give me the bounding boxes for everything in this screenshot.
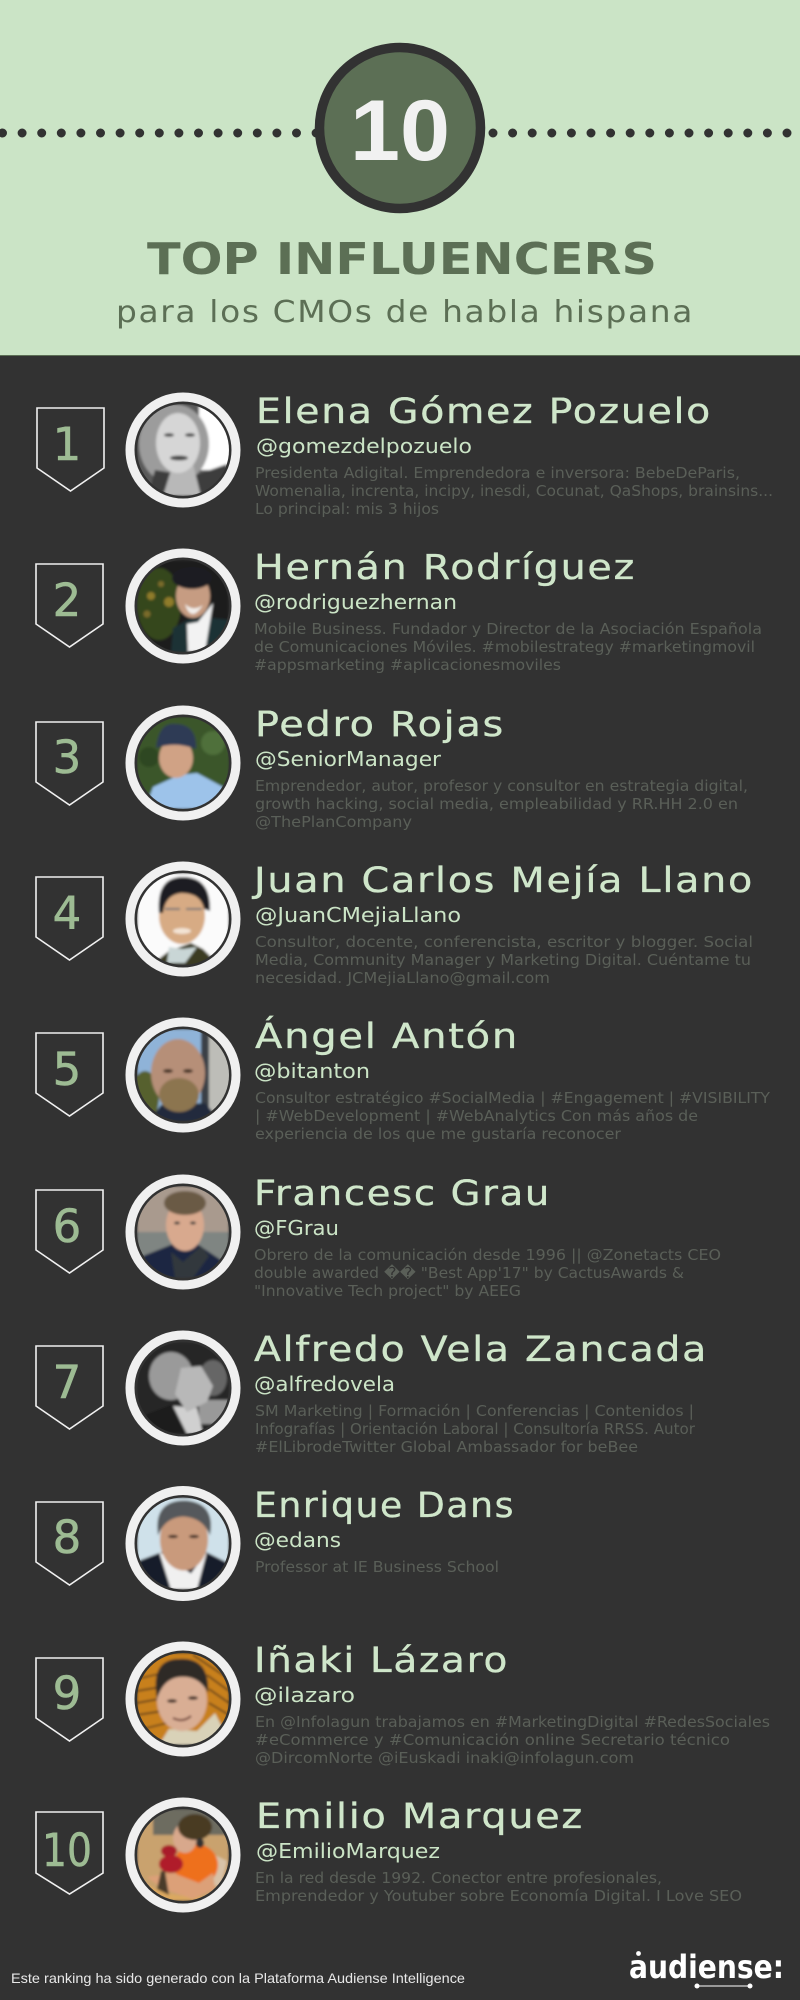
bio 6: Obrero de la comunicación desde 1996 || @Zonetacts CEO (254, 1246, 721, 1264)
handle 1: @gomezdelpozuelo (256, 434, 472, 458)
rank badge 8: 8 (53, 1511, 81, 1564)
rank badge 5: 5 (53, 1043, 81, 1096)
bio 1 (255, 464, 773, 518)
name 6: Francesc Grau (254, 1174, 551, 1214)
bio 3: Emprendedor, autor, profesor y consultor en estrategia digital, (255, 777, 748, 795)
bio 10: Emprendedor y Youtuber sobre Economía Digital. I Love SEO (255, 1887, 742, 1905)
name 3: Pedro Rojas (255, 705, 505, 745)
bio 4: Media, Community Manager y Marketing Digital. Cuéntame tu (255, 951, 751, 969)
influencer 7 (36, 1330, 708, 1456)
badge: 10 circle: 10 (350, 83, 450, 179)
name 10: Emilio Marquez (256, 1797, 584, 1837)
name 8: Enrique Dans (254, 1486, 515, 1526)
bio 2: de Comunicaciones Móviles. #mobilestrategy #marketingmovil (254, 638, 755, 656)
rank badge 1 (37, 408, 104, 491)
handle 9: @ilazaro (254, 1683, 355, 1707)
bio 6 (254, 1246, 721, 1300)
bio 7: SM Marketing | Formación | Conferencias | Contenidos | (255, 1402, 694, 1420)
avatar 1 (130, 397, 236, 503)
bio 3: growth hacking, social media, empleabilidad y RR.HH 2.0 en (255, 795, 738, 813)
rank badge 4: 4 (53, 887, 81, 940)
bio 2: #appsmarketing #aplicacionesmoviles (254, 656, 561, 674)
header panel (0, 0, 800, 356)
bio 4: Consultor, docente, conferencista, escritor y blogger. Social (255, 933, 753, 951)
bio 2: Mobile Business. Fundador y Director de la Asociación Española (254, 620, 762, 638)
bio 1: Lo principal: mis 3 hijos (255, 500, 439, 518)
name 1: Elena Gómez Pozuelo (256, 392, 712, 432)
avatar 3 (130, 710, 236, 816)
handle 4: @JuanCMejiaLlano (255, 903, 461, 927)
bio 9 (255, 1713, 770, 1767)
influencer 6 (36, 1174, 721, 1300)
rank badge 1: 1 (53, 418, 81, 471)
influencer 10 (36, 1797, 742, 1908)
bio 4: necesidad. JCMejiaLlano@gmail.com (255, 969, 550, 987)
name 5: Ángel Antón (255, 1016, 519, 1057)
influencer 9 (36, 1641, 770, 1767)
rank badge 2: 2 (53, 574, 81, 627)
handle 5: @bitanton (254, 1059, 370, 1083)
bio 5 (255, 1089, 771, 1143)
name 9: Iñaki Lázaro (254, 1641, 509, 1681)
bio 7 (255, 1402, 696, 1456)
avatar 8 (130, 1490, 236, 1596)
bio 7: Infografías | Orientación Laboral | Consultoría RRSS. Autor (255, 1420, 696, 1438)
bio 10: En la red desde 1992. Conector entre profesionales, (255, 1869, 662, 1887)
handle 8: @edans (254, 1528, 341, 1552)
bio 10 (255, 1869, 742, 1905)
bio 9: @DircomNorte @iEuskadi inaki@infolagun.com (255, 1749, 634, 1767)
avatar 4 (130, 866, 236, 972)
handle 7: @alfredovela (254, 1372, 395, 1396)
rank badge 4 (36, 877, 103, 960)
influencer 1 (37, 392, 773, 518)
name 4: Juan Carlos Mejía Llano (252, 861, 754, 901)
bio 5: | #WebDevelopment | #WebAnalytics Con más años de (255, 1107, 698, 1125)
bio 5: Consultor estratégico #SocialMedia | #Engagement | #VISIBILITY (255, 1089, 771, 1107)
bio 6: "Innovative Tech project" by AEEG (254, 1282, 521, 1300)
rank badge 10 (36, 1812, 103, 1894)
avatar 7 (130, 1335, 236, 1441)
influencer 5 (36, 1016, 771, 1143)
name 7: Alfredo Vela Zancada (254, 1330, 708, 1370)
bio 9: #eCommerce y #Comunicación online Secretario técnico (255, 1731, 730, 1749)
bio 5: experiencia de los que me gustaría reconocer (255, 1125, 622, 1143)
rank badge 5 (36, 1033, 103, 1116)
footer note: Este ranking ha sido generado con la Plataforma Audiense Intelligence (11, 1970, 465, 1986)
bio 8: Professor at IE Business School (255, 1558, 499, 1576)
rank badge 6: 6 (53, 1200, 81, 1253)
avatar 9 (130, 1646, 236, 1752)
influencer 8 (36, 1486, 515, 1596)
title: TOP INFLUENCERS (147, 234, 657, 285)
rank badge 10: 10 (42, 1824, 92, 1877)
bio 6: double awarded �� "Best App'17" by CactusAwards & (254, 1264, 684, 1282)
dotted line (2, 128, 795, 138)
handle 10: @EmilioMarquez (256, 1839, 440, 1863)
bio 3 (255, 777, 748, 831)
logo: audiense: audiense: (629, 1948, 784, 1986)
avatar 6 (130, 1179, 236, 1285)
bio 9: En @Infolagun trabajamos en #MarketingDigital #RedesSociales (255, 1713, 770, 1731)
badge: 10 circle (320, 48, 480, 208)
handle 3: @SeniorManager (255, 747, 442, 771)
influencer 4 (36, 861, 754, 987)
bio 1: Womenalia, increnta, incipy, inesdi, Cocunat, QaShops, brainsins... (255, 482, 773, 500)
rank badge 3 (36, 722, 103, 805)
influencer 3 (36, 705, 748, 831)
avatar 5 (130, 1022, 236, 1128)
rank badge 2 (36, 564, 103, 647)
bio 7: #ElLibrodeTwitter Global Ambassador for beBee (255, 1438, 638, 1456)
bio 3: @ThePlanCompany (255, 813, 412, 831)
handle 2: @rodriguezhernan (254, 590, 457, 614)
rank badge 9 (36, 1658, 103, 1741)
rank badge 3: 3 (53, 731, 81, 784)
handle 6: @FGrau (254, 1216, 339, 1240)
rank badge 7: 7 (53, 1356, 81, 1409)
avatar 10 (130, 1802, 236, 1908)
rank badge 6 (36, 1190, 103, 1273)
rank badge 7 (36, 1346, 103, 1429)
avatar 2 (130, 553, 236, 659)
bio 4 (255, 933, 753, 987)
bio 2 (254, 620, 762, 674)
rank badge 9: 9 (53, 1667, 81, 1720)
rank badge 8 (36, 1502, 103, 1585)
subtitle: para los CMOs de habla hispana (116, 295, 694, 330)
influencer 2 (36, 548, 762, 674)
bio 1: Presidenta Adigital. Emprendedora e inversora: BebeDeParis, (255, 464, 740, 482)
name 2: Hernán Rodríguez (254, 548, 636, 588)
